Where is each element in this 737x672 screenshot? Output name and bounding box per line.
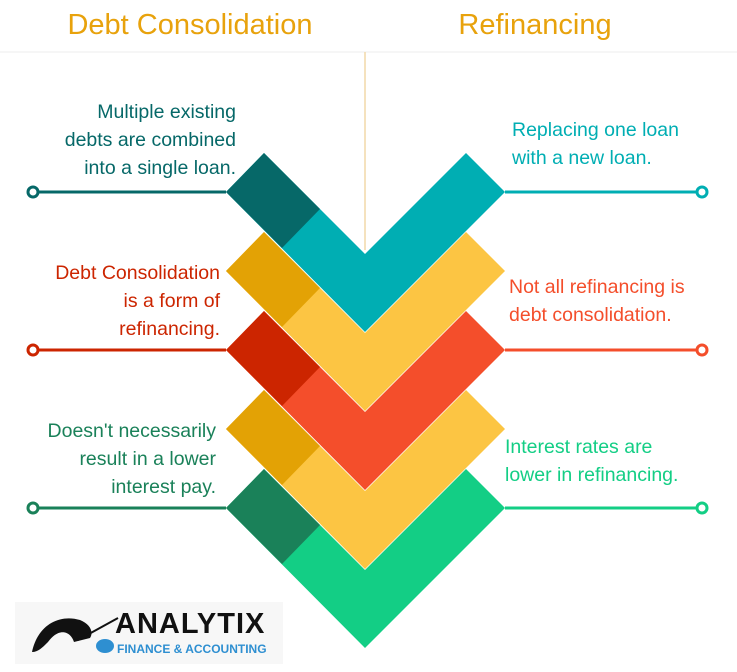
connector lines <box>28 187 707 513</box>
text: left 2: is a form of <box>124 290 220 312</box>
text: left 3: result in a lower <box>79 448 216 470</box>
title: Debt Consolidation: Debt Consolidation <box>67 9 313 41</box>
text: right 1: Replacing one loan <box>512 119 679 141</box>
text: left 2 <box>55 262 220 340</box>
text: right 3: Interest rates are <box>505 436 652 458</box>
text: left 1 <box>65 101 236 179</box>
text: left 1: debts are combined <box>65 129 236 151</box>
title: Refinancing: Refinancing <box>458 9 612 41</box>
text: right 3: lower in refinancing. <box>505 464 678 486</box>
text: left 2: Debt Consolidation <box>55 262 220 284</box>
chevron: yellow lower <box>226 390 505 569</box>
chevron: teal <box>226 153 505 332</box>
text: left 3: interest pay. <box>111 476 216 498</box>
text: left 1: Multiple existing <box>97 101 236 123</box>
text: right 1 <box>512 119 679 169</box>
logo icon <box>32 617 118 653</box>
text: left 3 <box>48 420 216 498</box>
chevron: green <box>226 469 505 648</box>
logo: FINANCE & ACCOUNTING <box>117 642 267 656</box>
logo text: ANALYTIX <box>115 608 265 640</box>
text: right 2: debt consolidation. <box>509 304 672 326</box>
chevron: red <box>226 311 505 490</box>
text: right 2 <box>509 276 685 326</box>
chevron: yellow upper <box>226 232 505 411</box>
text: right 2: Not all refinancing is <box>509 276 685 298</box>
text: right 3 <box>505 436 678 486</box>
logo <box>15 602 283 664</box>
text: left 1: into a single loan. <box>84 157 236 179</box>
text: right 1: with a new loan. <box>512 147 652 169</box>
text: left 3: Doesn't necessarily <box>48 420 216 442</box>
text: left 2: refinancing. <box>119 318 220 340</box>
